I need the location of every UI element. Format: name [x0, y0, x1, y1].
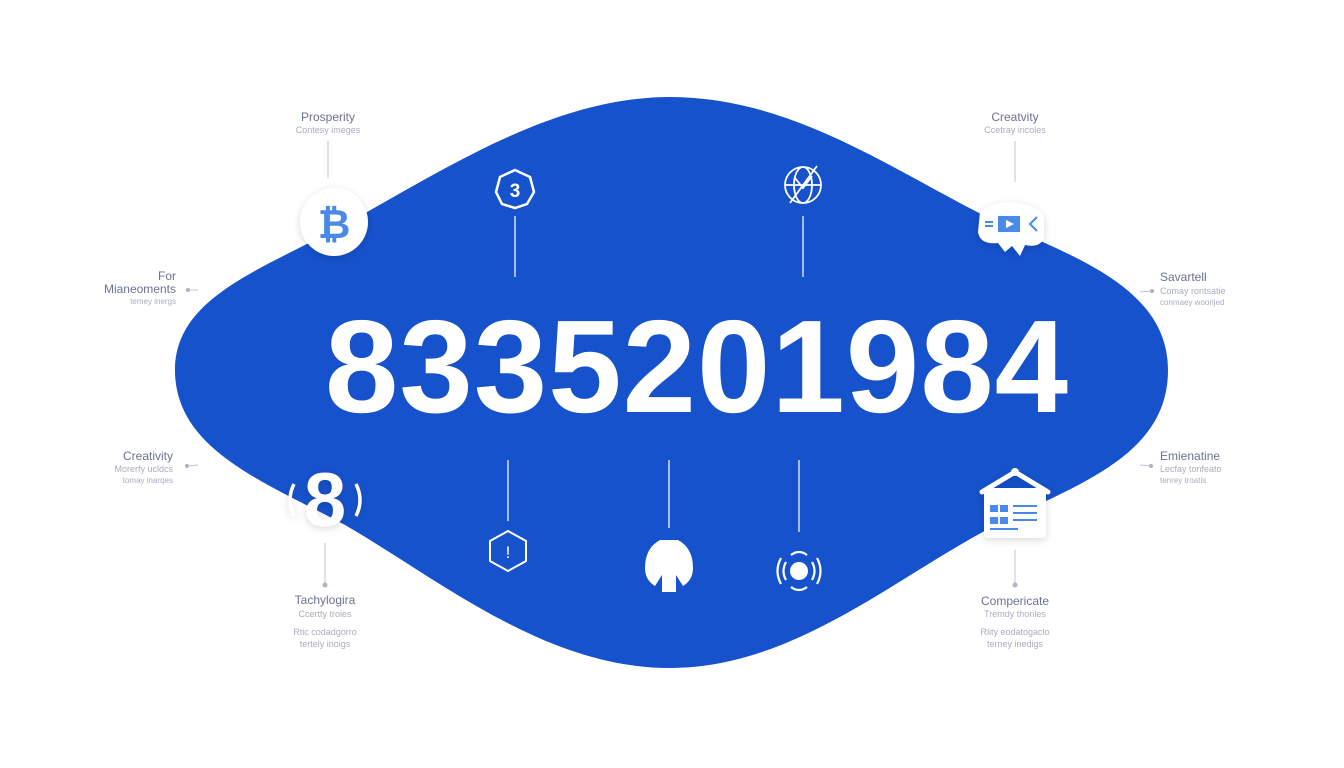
- label: Compericate: Tremdy thonles: [984, 609, 1046, 619]
- label: For Management: Mianeoments: [104, 282, 176, 296]
- label: Compericate: [980, 550, 1050, 649]
- label: Creativity left: Morerfy ucldcs: [114, 464, 173, 474]
- label: Tachylogira: Ccertty troies: [298, 609, 352, 619]
- icon: bitcoin circle: ₿: [318, 203, 350, 247]
- label: Prosperity: [296, 110, 361, 178]
- label: Tachylogira: [293, 543, 357, 649]
- label: Tachylogira: Tachylogira: [295, 593, 356, 607]
- icon: hexagon alert: !: [506, 543, 510, 562]
- icon: bitcoin circle: [300, 188, 368, 256]
- icon: dashboard card: [982, 468, 1048, 538]
- label: For Management: For: [158, 269, 176, 283]
- icon: (8): 8: [304, 458, 346, 543]
- label: Tachylogira: tertely inoigs: [300, 639, 351, 649]
- label: Compericate: Rlity eodatogaclo: [980, 627, 1050, 637]
- icon: figure: [645, 460, 693, 592]
- label: Emienatine: Emienatine: [1160, 449, 1220, 463]
- blue blob background: [175, 97, 1168, 668]
- icon: hexagon 3 with line: [496, 170, 534, 277]
- label: Creativity top right: Ccetray incoles: [984, 125, 1046, 135]
- label: Creativity left: [114, 449, 198, 485]
- icon: hexagon alert: [490, 460, 526, 571]
- label: Prosperity: Prosperity: [301, 110, 355, 124]
- icon: signal: [778, 460, 820, 590]
- icon: (8): [290, 458, 360, 543]
- label: Creativity left: tomay inarqes: [123, 476, 173, 485]
- label: Creativity left: Creativity: [123, 449, 173, 463]
- label: Emienatine: tenrey troatis: [1160, 476, 1206, 485]
- icon: video chat cloud: [978, 202, 1044, 256]
- label: Tachylogira: Rtic codadgorro: [293, 627, 357, 637]
- icon: globe clock with line: [785, 166, 821, 277]
- label: Compericate: Compericate: [981, 594, 1049, 608]
- label: Creativity top right: Creatvity: [991, 110, 1039, 124]
- big number: 8335201984: [325, 293, 1069, 440]
- label: Savartell: Comay rontsatie: [1160, 286, 1226, 296]
- icon: hexagon 3 with line: 3: [510, 181, 520, 202]
- label: For Management: temey inergs: [130, 297, 176, 306]
- label: Creativity top right: [984, 110, 1046, 182]
- label: Compericate: terney inedigs: [987, 639, 1044, 649]
- label: Emienatine: Lecfay tonfeato: [1160, 464, 1222, 474]
- label: Emienatine: [1140, 449, 1222, 485]
- label: Savartell: conmaey woorijed: [1160, 298, 1224, 307]
- label: Savartell: [1140, 270, 1226, 307]
- label: For Management: [104, 269, 198, 306]
- label: Prosperity: Contesy imeges: [296, 125, 361, 135]
- label: Savartell: Savartell: [1160, 270, 1207, 284]
